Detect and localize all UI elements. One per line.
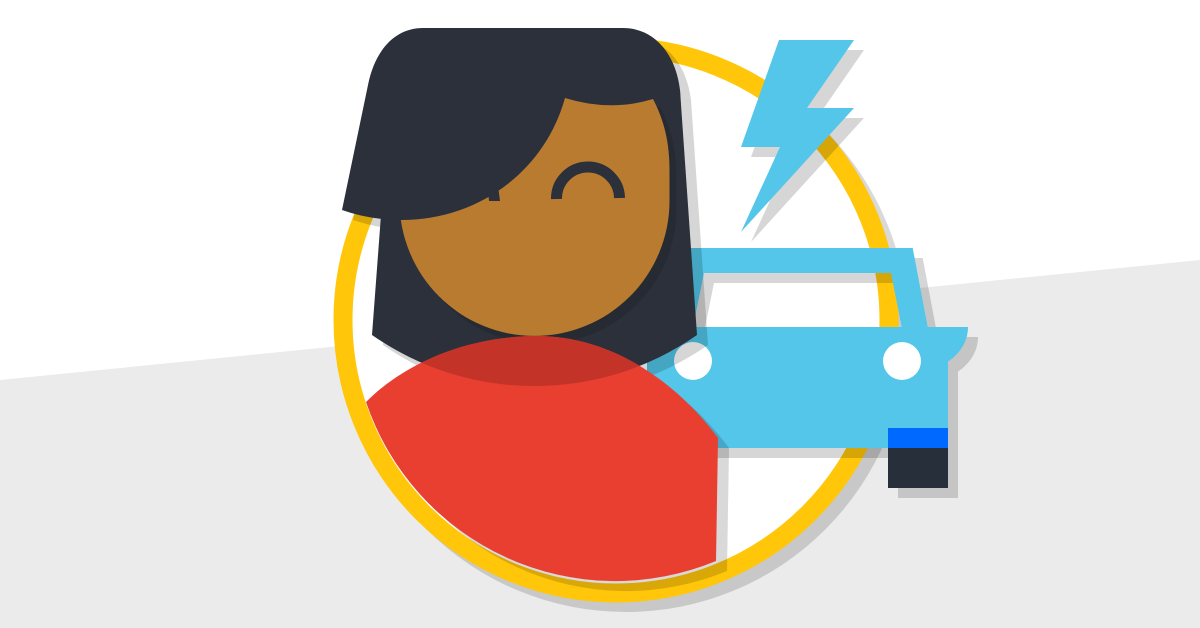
shirt shadow [377,346,729,591]
icon: lightning bolt [741,40,854,232]
back hair [372,60,697,386]
hair shadow [353,38,708,396]
yellow ring [343,47,889,593]
lightning bolt shadow [751,50,864,242]
car body [627,248,968,448]
tyre [888,448,948,488]
circle shadow [344,48,908,612]
hair fringe [342,28,681,220]
car [627,248,968,488]
face shadow [406,88,676,344]
left headlight [674,342,712,380]
bumper blue stripe [888,428,948,448]
face [400,80,670,336]
shirt [366,336,718,581]
right headlight [883,342,921,380]
car shadow [637,258,978,498]
hair seen through shirt [422,336,640,386]
left eye fragment [488,186,500,201]
right eye [556,167,620,199]
